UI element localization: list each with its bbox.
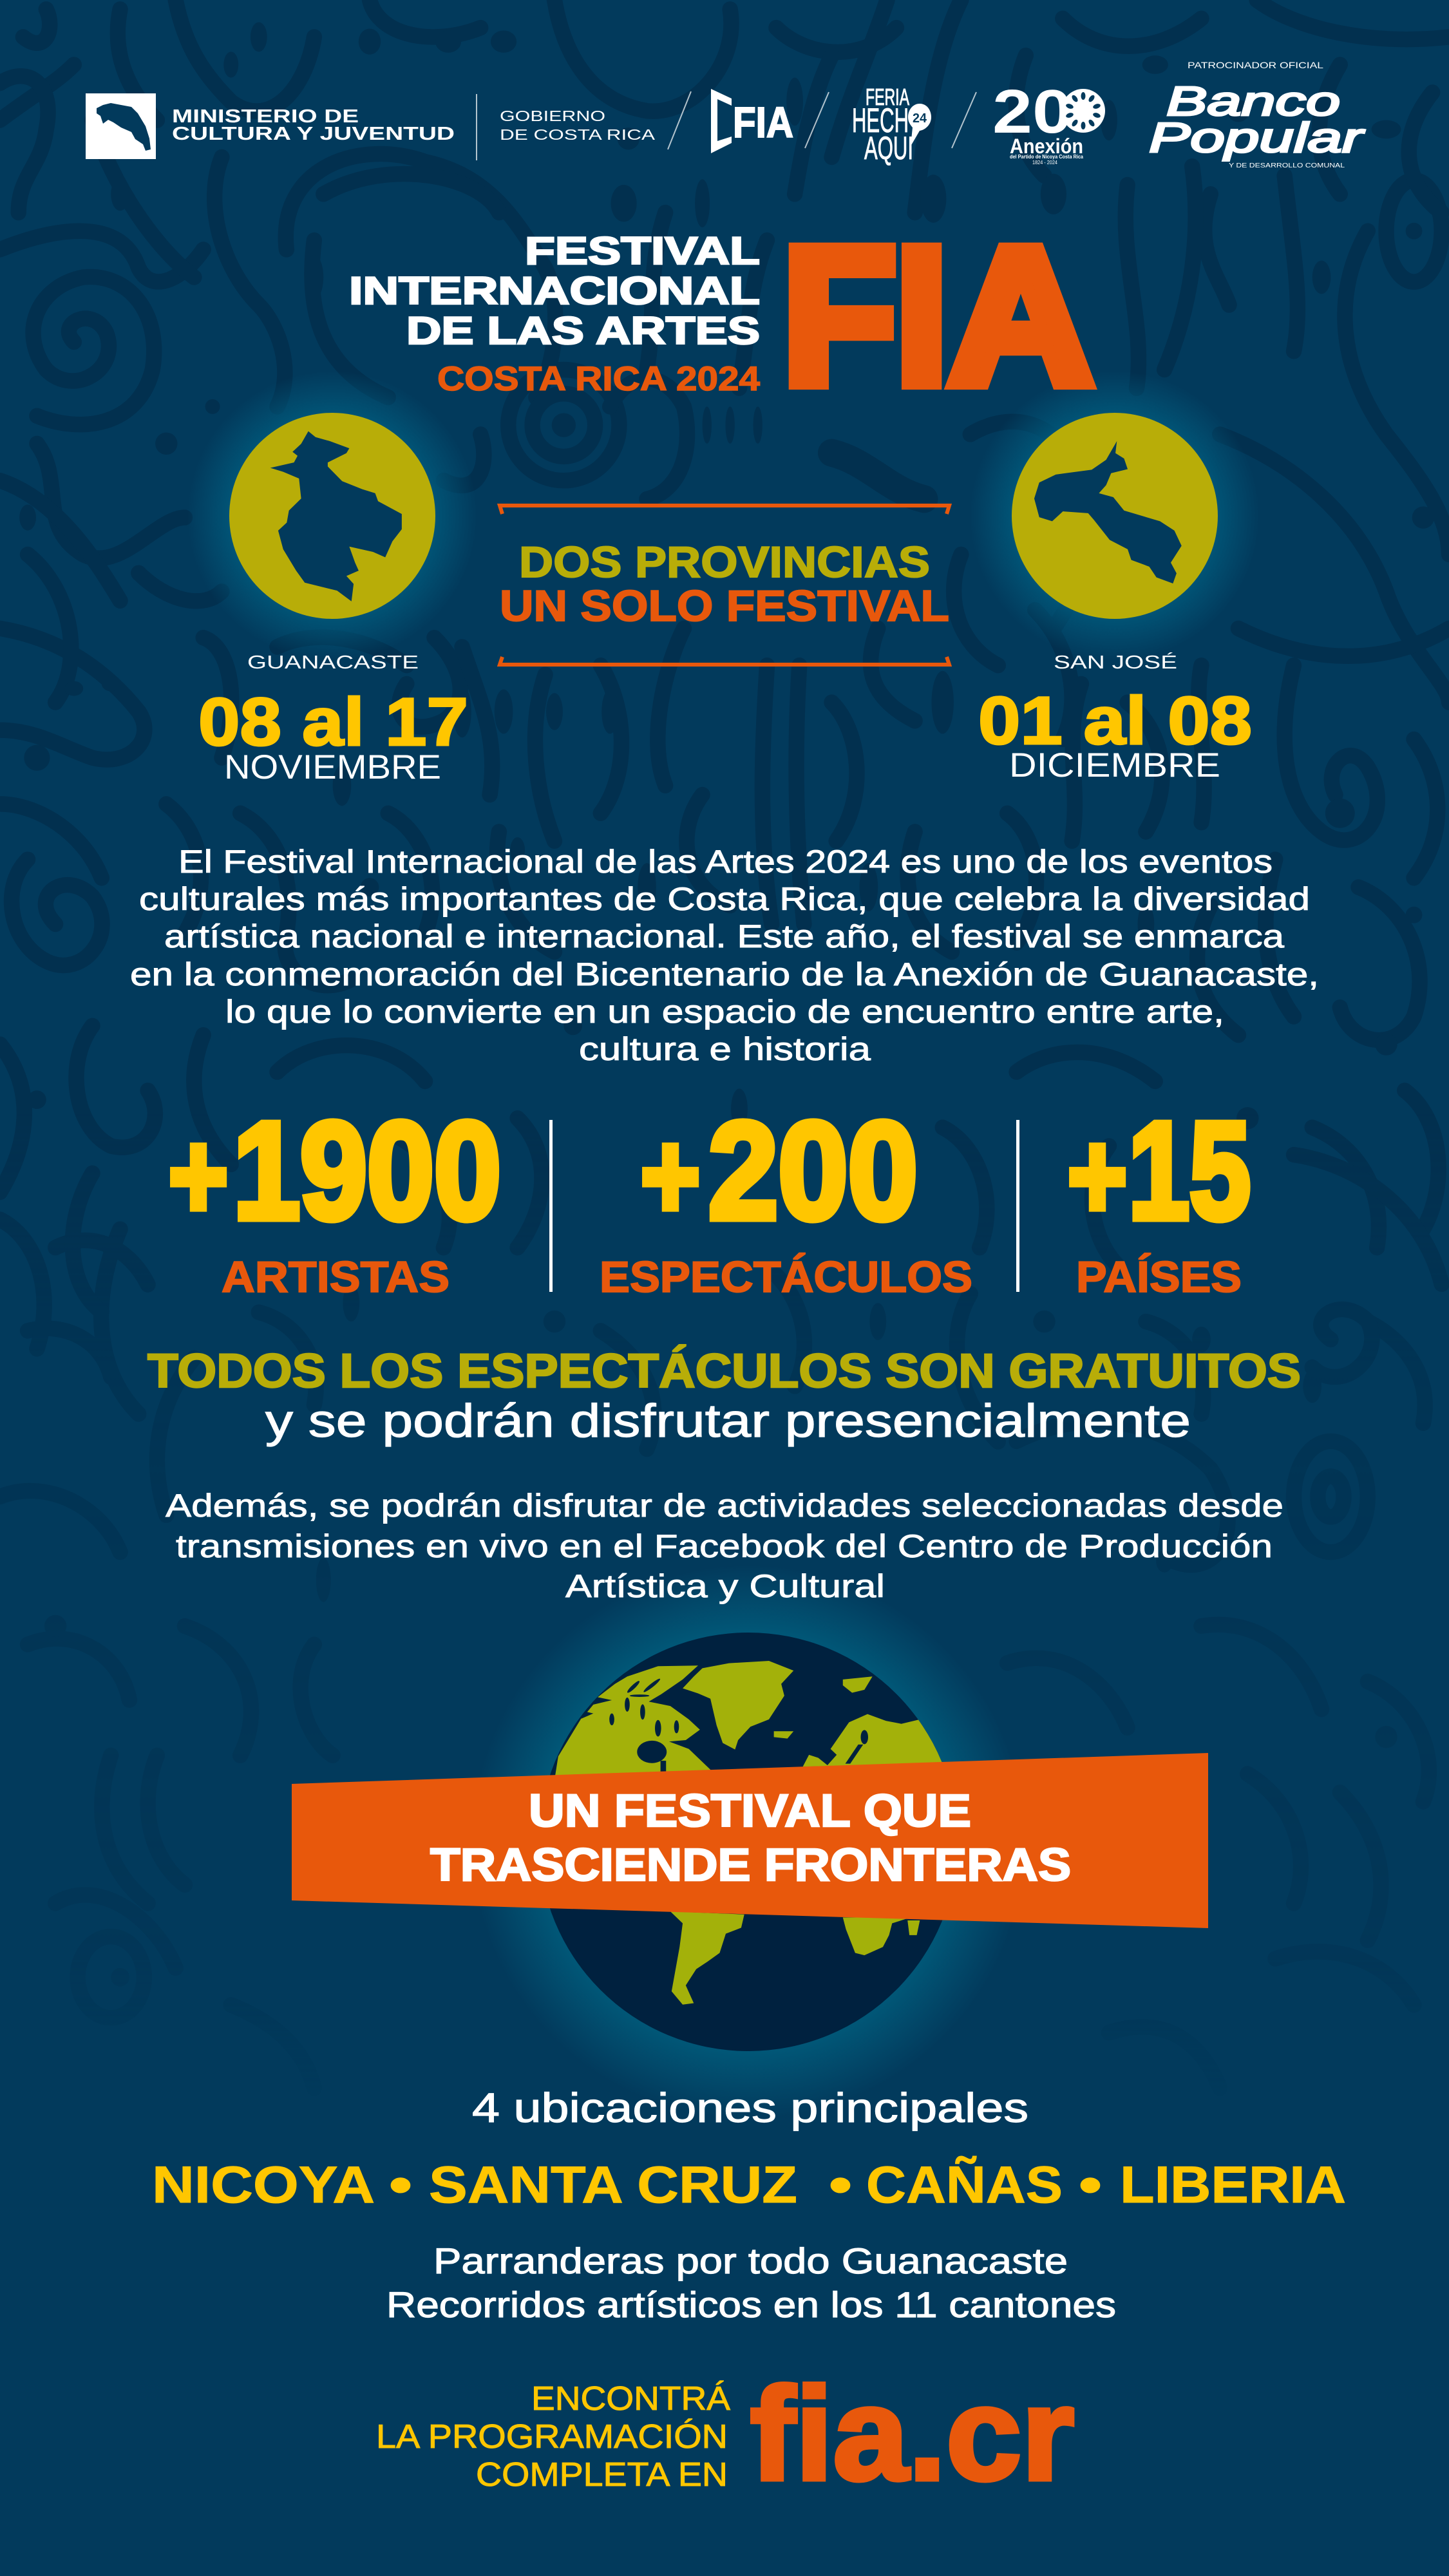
text block: streaming note: Artística y Cultural [565,1568,885,1604]
text block: festival description: cultura e historia [579,1031,871,1067]
text: location names: • [389,2156,412,2214]
logo: Ministerio de Cultura y Juventud: CULTURA Y JUVENTUD [172,124,455,144]
logo: Feria Hecho Aquí [852,84,931,166]
text: location names: LIBERIA [1120,2156,1346,2214]
text block: festival description: culturales más importantes de Costa Rica, que celebra la diversidad [139,881,1310,917]
text: location names: NICOYA [152,2156,375,2214]
stat: espectáculos: ESPECTÁCULOS [600,1253,972,1302]
logo: Feria Hecho Aquí: HECH [852,102,909,140]
stat: artistas [169,1093,501,1302]
stat: espectáculos: + [641,1108,700,1244]
text: location names: • [1079,2156,1102,2214]
stat: países: 15 [1128,1093,1251,1248]
stat: artistas: + [169,1108,228,1244]
logo: Gobierno de Costa Rica: DE COSTA RICA [500,126,656,143]
stat: países [1068,1093,1251,1302]
text block: festival description: en la conmemoración del Bicentenario de la Anexión de Guanacaste, [130,956,1319,992]
call to action: programme website: ENCONTRÁ [531,2380,730,2418]
logo: 200 Anexión: 20 [992,77,1072,146]
title: FIA wordmark: FI [783,207,947,424]
title: Festival Internacional de las Artes: INTERNACIONAL [349,269,760,312]
text block: festival description: El Festival Internacional de las Artes 2024 es uno de los eventos [178,844,1273,880]
heading: free shows: TODOS LOS ESPECTÁCULOS SON GRATUITOS [147,1344,1301,1397]
logo: Feria Hecho Aquí: FERIA [866,84,909,110]
panel: San José province: SAN JOSÉ [1054,652,1177,673]
icon: Guanacaste map [229,413,435,619]
panel: San José province: 01 al 08 [978,683,1252,759]
text block: streaming note: transmisiones en vivo en el Facebook del Centro de Producción [176,1528,1273,1564]
text block: festival description [130,844,1319,1067]
logo: Gobierno de Costa Rica [500,108,656,143]
stat: países: PAÍSES [1076,1253,1242,1302]
stat: espectáculos [600,1093,972,1302]
logo: Banco Popular sponsor: PATROCINADOR OFICIAL [1188,60,1323,70]
panel: Guanacaste province: GUANACASTE [247,652,419,673]
text: main locations heading: 4 ubicaciones principales [472,2085,1028,2131]
logo: Banco Popular sponsor [1149,60,1365,169]
icon: San José map [1012,413,1218,619]
text: location names: SANTA CRUZ [429,2156,797,2214]
panel: header logos [86,60,1365,169]
title: Festival Internacional de las Artes: FESTIVAL [525,229,760,272]
stat: espectáculos: 200 [708,1093,918,1248]
logo: Banco Popular sponsor: Y DE DESARROLLO COMUNAL [1229,162,1345,169]
logo: Feria Hecho Aquí: AQUI [864,130,913,166]
text block: festival description: artística nacional e internacional. Este año, el festival se enmarca [164,918,1284,954]
subheading: in person: y se podrán disfrutar presencialmente [265,1396,1191,1447]
text: location names: CAÑAS [866,2155,1063,2214]
logo: Gobierno de Costa Rica: GOBIERNO [500,108,605,124]
text block: streaming note: Además, se podrán disfrutar de actividades seleccionadas desde [166,1488,1283,1524]
call to action: programme website [376,2360,1074,2508]
title: Festival Internacional de las Artes [349,229,761,398]
logo: 200 Anexión: 1824 - 2024 [1032,160,1058,166]
title: Festival Internacional de las Artes: COSTA RICA 2024 [437,360,761,398]
text: extra activities: Recorridos artísticos en los 11 cantones [386,2284,1116,2325]
logo: FIA [711,89,793,153]
banner: un festival que trasciende fronteras [292,1753,1208,1928]
logo: 200 Anexión [992,77,1105,166]
panel: dos provincias bracket: UN SOLO FESTIVAL [500,582,949,630]
text: location names: • [829,2156,852,2214]
stat: artistas: 1900 [233,1093,501,1248]
panel: San José province: DICIEMBRE [1009,746,1220,784]
title: Festival Internacional de las Artes: DE LAS ARTES [406,309,760,352]
logo: 200 Anexión: Anexión [1010,135,1083,158]
call to action: programme website: fia.cr [750,2360,1074,2508]
panel: dos provincias bracket: DOS PROVINCIAS [519,538,930,587]
text block: streaming note [166,1488,1283,1604]
text block: festival description: lo que lo convierte en un espacio de encuentro entre arte, [225,994,1224,1030]
logo: Feria Hecho Aquí: 24 [913,111,927,126]
panel: San José province [978,413,1252,784]
panel: Guanacaste province: NOVIEMBRE [224,748,441,786]
panel: Guanacaste province [198,413,468,786]
logo: FIA: FIA [733,99,793,147]
logo: Banco Popular sponsor: Banco [1166,78,1340,124]
title: FIA wordmark: A [949,207,1092,424]
logo: Banco Popular sponsor: Popular [1149,114,1365,161]
stat: países: + [1068,1108,1127,1244]
text: extra activities: Parranderas por todo Guanacaste [433,2240,1068,2281]
banner: un festival que trasciende fronteras: TRASCIENDE FRONTERAS [430,1840,1071,1891]
banner: un festival que trasciende fronteras: UN FESTIVAL QUE [529,1786,971,1837]
logo: 200 Anexión: del Partido de Nicoya Costa Rica [1010,154,1083,160]
panel: festival figures [169,1093,1251,1302]
panel: dos provincias bracket [500,506,949,665]
icon: globe [539,1633,958,2051]
call to action: programme website: COMPLETA EN [476,2456,728,2494]
stat: artistas: ARTISTAS [222,1253,450,1302]
call to action: programme website: LA PROGRAMACIÓN [376,2418,728,2456]
panel: Guanacaste province: 08 al 17 [198,685,468,760]
logo: Ministerio de Cultura y Juventud: MINISTERIO DE [172,106,359,127]
text: extra activities [386,2240,1116,2325]
logo: Ministerio de Cultura y Juventud [86,93,455,159]
